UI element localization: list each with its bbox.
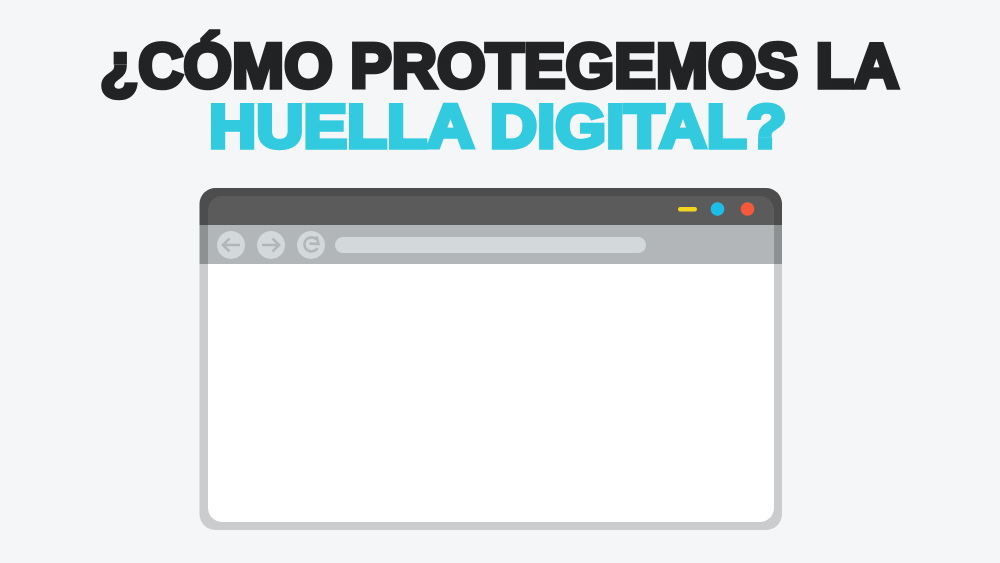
minimize button [678, 207, 697, 212]
icon: back arrow [217, 231, 245, 259]
toolbar [208, 225, 774, 264]
title line 1: ¿CÓMO PROTEGEMOS LA [100, 32, 899, 102]
toolbar frame [200, 225, 782, 264]
title [100, 32, 899, 160]
window frame [200, 188, 782, 530]
address bar [335, 237, 646, 253]
browser window [200, 188, 782, 530]
title line 2: HUELLA DIGITAL? [209, 92, 786, 160]
title bar frame [200, 188, 782, 225]
close button [741, 202, 754, 216]
window content area [208, 264, 774, 522]
icon: forward arrow [257, 231, 285, 259]
title bar [208, 196, 774, 225]
maximize button [711, 202, 724, 216]
icon: reload [297, 231, 325, 259]
